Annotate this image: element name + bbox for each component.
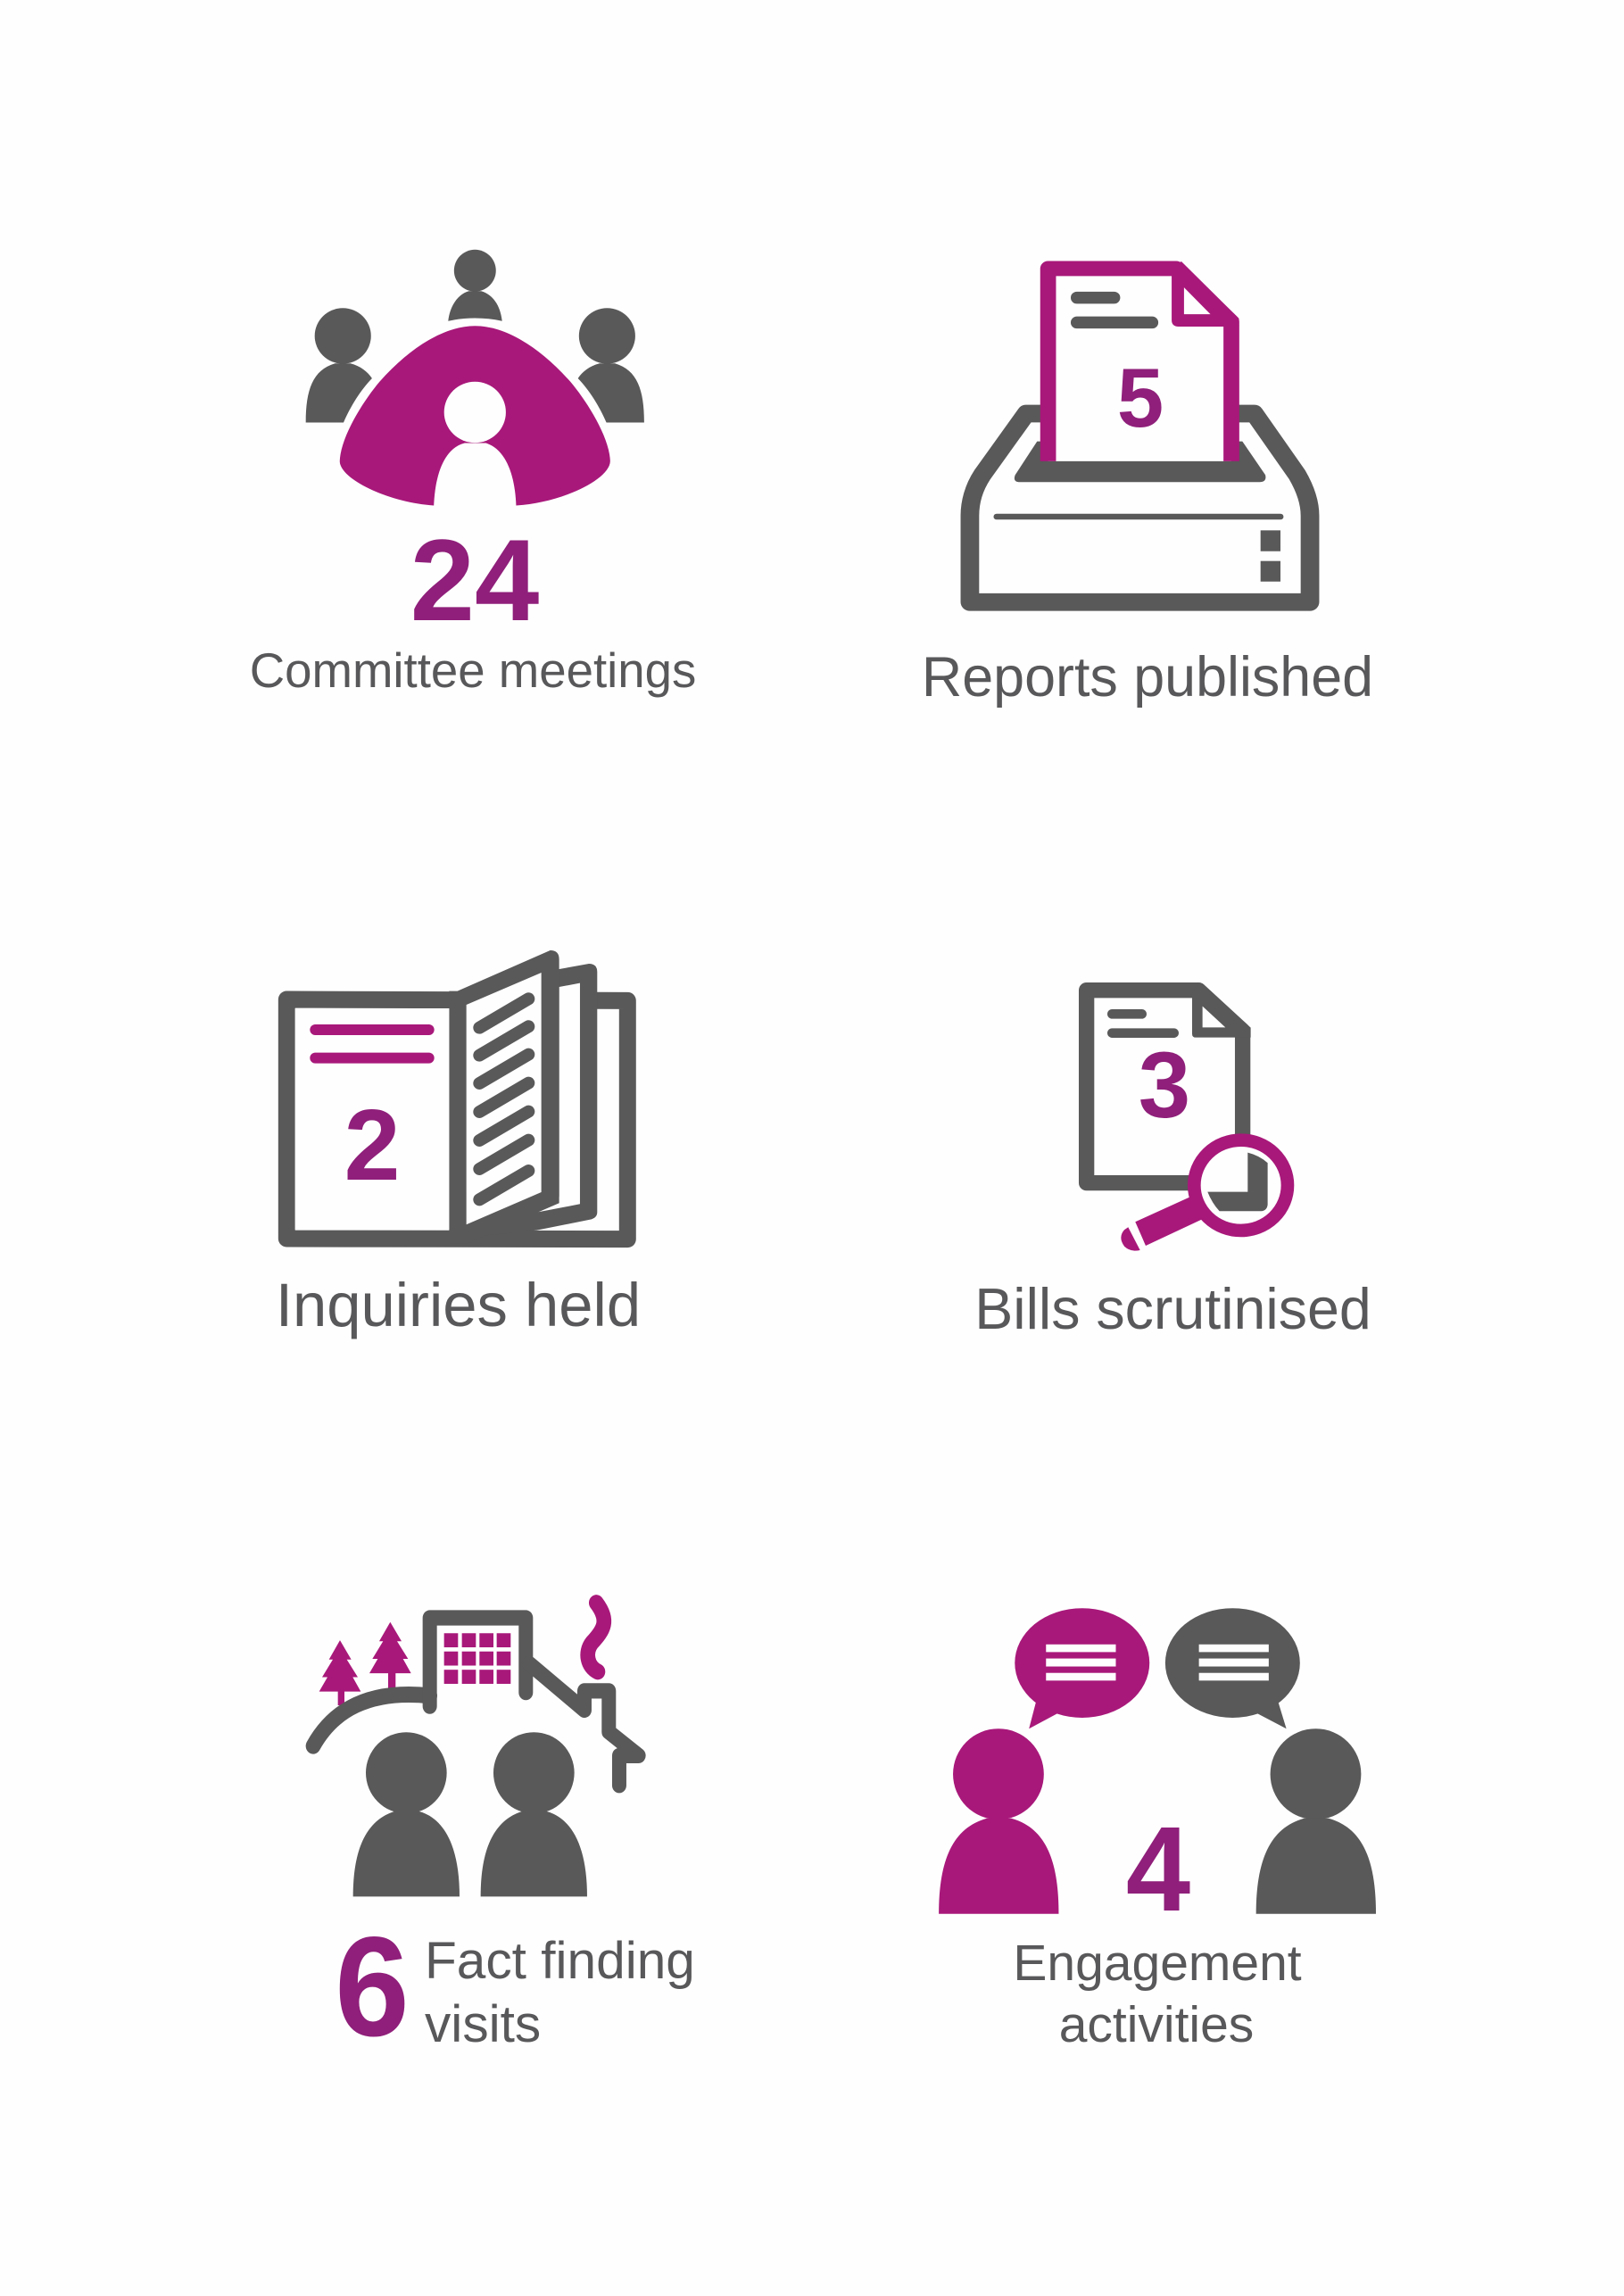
label: inquiries held: Inquiries held xyxy=(276,1271,641,1339)
icon: two people in a landscape xyxy=(313,1603,639,1896)
label: engagement activities: Engagement xyxy=(1013,1935,1302,1992)
icon: document in a tray xyxy=(970,261,1310,602)
panel: engagement activities xyxy=(939,1608,1376,2053)
label: fact finding visits xyxy=(425,1932,695,2053)
icon: open book xyxy=(286,950,627,1243)
label: committee meetings: Committee meetings xyxy=(250,643,696,698)
number: 6: 6 xyxy=(335,1907,410,2066)
label: engagement activities xyxy=(1013,1935,1302,2053)
icon: people around a table xyxy=(306,250,644,506)
number: 3: 3 xyxy=(1139,1033,1190,1138)
label: engagement activities: activities xyxy=(1059,1996,1254,2053)
number: 5: 5 xyxy=(1117,351,1164,444)
panel: bills scrutinised xyxy=(974,982,1371,1341)
panel: committee meetings xyxy=(250,250,696,698)
label: fact finding visits: visits xyxy=(425,1995,541,2053)
label: fact finding visits: Fact finding xyxy=(425,1932,695,1990)
panel: reports published xyxy=(922,261,1373,709)
panel: fact finding visits xyxy=(313,1603,695,2066)
number: 24: 24 xyxy=(410,515,539,645)
icon: document with magnifying glass xyxy=(1087,982,1288,1251)
number: 2: 2 xyxy=(344,1089,400,1201)
label: reports published: Reports published xyxy=(922,646,1373,709)
number: 4: 4 xyxy=(1126,1803,1190,1937)
label: bills scrutinised: Bills scrutinised xyxy=(974,1277,1371,1341)
icon: two people talking xyxy=(939,1608,1376,1914)
panel: inquiries held xyxy=(276,950,641,1339)
